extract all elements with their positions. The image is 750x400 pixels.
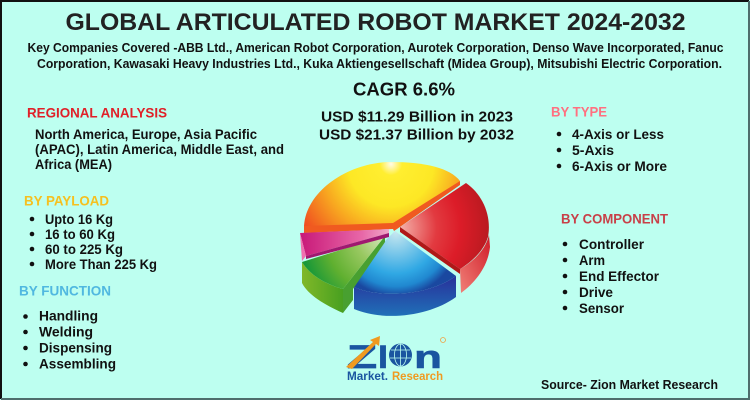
panel: by function <box>19 282 116 372</box>
component list: Sensor <box>579 301 625 316</box>
panel: by type <box>551 104 667 174</box>
key companies text <box>28 40 724 71</box>
red inner wall <box>400 227 460 274</box>
market size: USD $21.37 Billion by 2032 <box>319 126 514 144</box>
heading: by component: BY COMPONENT <box>561 210 668 226</box>
function list: Handling <box>39 308 98 324</box>
logo wordmark: Z <box>347 339 377 375</box>
market size: USD $11.29 Billion in 2023 <box>321 108 513 126</box>
key companies text: Corporation, Kawasaki Heavy Industries Ltd., Kuka Aktiengesellschaft (Midea Group), Mitsubishi Electric Corporation. <box>37 56 722 71</box>
logo wordmark: n <box>414 339 442 375</box>
type list <box>557 127 667 174</box>
logo wordmark: I <box>378 339 388 375</box>
slice: green <box>302 236 385 313</box>
regions text: North America, Europe, Asia Pacific <box>35 127 257 142</box>
payload list: 16 to 60 Kg <box>45 227 115 242</box>
component list: End Effector <box>579 269 660 284</box>
icon: growth arrow <box>346 336 380 369</box>
payload list: More Than 225 Kg <box>45 257 157 272</box>
panel: by component <box>561 210 668 316</box>
red side wall <box>460 235 490 293</box>
heading: regional analysis: REGIONAL ANALYSIS <box>27 104 167 120</box>
type list: 5-Axis <box>572 143 614 158</box>
function list: Welding <box>39 324 93 340</box>
slice: pink <box>300 229 389 261</box>
logo wordmark <box>347 339 442 375</box>
regions text <box>35 127 284 172</box>
panel: by payload <box>24 192 157 272</box>
regions text: (APAC), Latin America, Middle East, and <box>35 142 284 157</box>
component list <box>563 237 660 316</box>
component list: Drive <box>579 285 613 300</box>
heading: by function: BY FUNCTION <box>19 282 111 298</box>
function list <box>23 308 116 372</box>
logo tagline: Market. <box>347 371 388 383</box>
payload list: Upto 16 Kg <box>45 212 113 227</box>
payload list: 60 to 225 Kg <box>45 242 123 257</box>
slice: blue <box>354 231 456 316</box>
function list: Dispensing <box>39 340 112 356</box>
source credit: Source- Zion Market Research <box>541 378 718 392</box>
payload list <box>30 212 157 272</box>
type list: 6-Axis or More <box>572 159 667 174</box>
function list: Assembling <box>39 356 116 372</box>
component list: Arm <box>579 253 605 268</box>
icon: globe <box>389 344 412 366</box>
chart: 3D pie <box>300 162 490 316</box>
component list: Controller <box>579 237 645 252</box>
heading: by type: BY TYPE <box>551 104 607 120</box>
regions text: Africa (MEA) <box>35 157 112 172</box>
logo tagline <box>347 371 443 383</box>
registered mark <box>440 338 446 342</box>
market size <box>319 108 514 144</box>
panel: regional analysis <box>27 104 284 172</box>
CAGR: CAGR 6.6% <box>353 80 455 100</box>
slice: red <box>400 183 490 293</box>
red top face <box>400 183 489 269</box>
title: GLOBAL ARTICULATED ROBOT MARKET 2024-2032 <box>66 9 686 36</box>
heading: by payload: BY PAYLOAD <box>24 192 109 208</box>
type list: 4-Axis or Less <box>572 127 664 142</box>
logo tagline: Research <box>392 371 443 383</box>
logo: Zion Market Research <box>346 336 446 383</box>
slice: yellow <box>304 162 460 233</box>
